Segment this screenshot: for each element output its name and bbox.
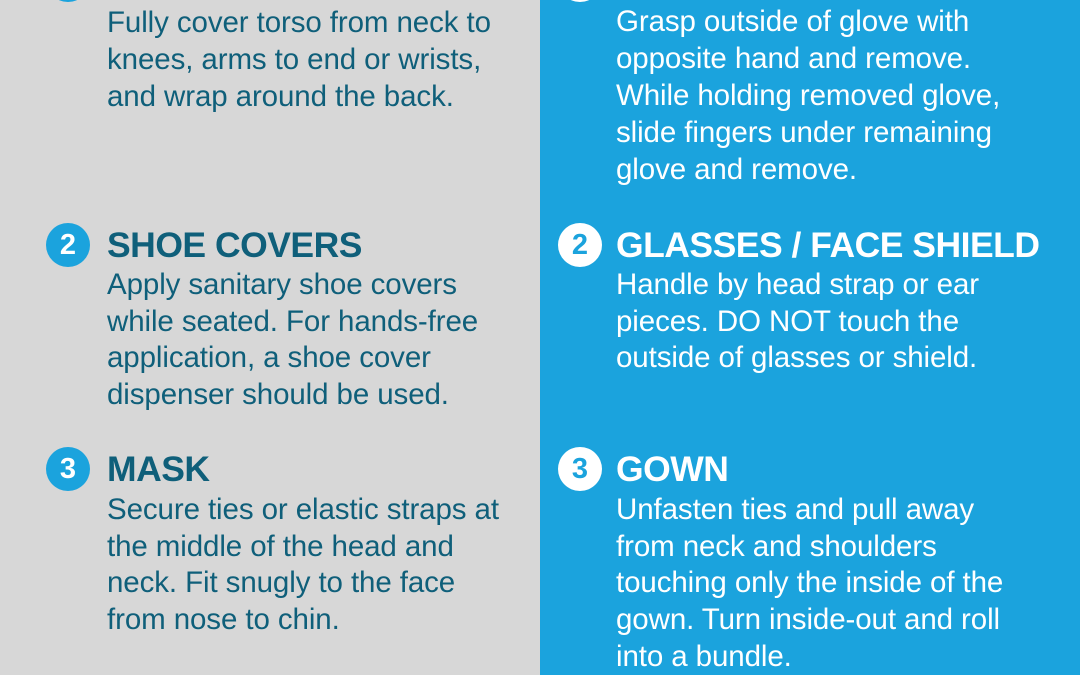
step 2 number: 2 bbox=[572, 229, 588, 261]
step 2 text bbox=[616, 268, 979, 374]
step 3 heading: MASK bbox=[107, 449, 210, 489]
step 2 number bbox=[46, 223, 90, 267]
step 1 text: While holding removed glove, bbox=[616, 79, 1000, 112]
step 2 text: Apply sanitary shoe covers bbox=[107, 268, 457, 301]
step 3 number: 3 bbox=[60, 453, 76, 485]
step 3 heading: GOWN bbox=[616, 449, 728, 489]
step 2 text bbox=[107, 268, 478, 411]
step 1 text: opposite hand and remove. bbox=[616, 42, 971, 75]
step 1 number (cut off) bbox=[46, 0, 90, 2]
step 3 text bbox=[107, 493, 499, 636]
step 3 text: gown. Turn inside-out and roll bbox=[616, 603, 1000, 636]
step 3 text: Unfasten ties and pull away bbox=[616, 493, 974, 526]
step 2 text: application, a shoe cover bbox=[107, 341, 431, 374]
step 3 number: 3 bbox=[572, 453, 588, 485]
step 3 text: into a bundle. bbox=[616, 640, 792, 673]
step 1 number (cut off) bbox=[558, 0, 602, 2]
panel: doffing (right) bbox=[540, 0, 1080, 675]
step 1 text: knees, arms to end or wrists, bbox=[107, 43, 481, 76]
step 1 text: and wrap around the back. bbox=[107, 80, 454, 113]
panel: donning (left) bbox=[0, 0, 540, 675]
step 1 text: Fully cover torso from neck to bbox=[107, 6, 491, 39]
step 1 text: glove and remove. bbox=[616, 153, 857, 186]
step 2 text: Handle by head strap or ear bbox=[616, 268, 979, 301]
step 1 text: slide fingers under remaining bbox=[616, 116, 992, 149]
step 2 heading: GLASSES / FACE SHIELD bbox=[616, 225, 1039, 265]
step 3 text: the middle of the head and bbox=[107, 530, 454, 563]
step 3 text: touching only the inside of the bbox=[616, 566, 1003, 599]
step 2 text: pieces. DO NOT touch the bbox=[616, 305, 959, 338]
step 1 text bbox=[107, 6, 491, 113]
step 1 text: Grasp outside of glove with bbox=[616, 5, 969, 38]
step 2 text: outside of glasses or shield. bbox=[616, 341, 977, 374]
step 2 text: while seated. For hands-free bbox=[107, 305, 478, 338]
step 3 number bbox=[46, 447, 90, 491]
step 3 text bbox=[616, 493, 1003, 673]
step 3 number bbox=[558, 447, 602, 491]
step 3 text: Secure ties or elastic straps at bbox=[107, 493, 499, 526]
step 2 number: 2 bbox=[60, 229, 76, 261]
step 1 text bbox=[616, 5, 1000, 186]
step 2 text: dispenser should be used. bbox=[107, 378, 449, 411]
step 3 text: neck. Fit snugly to the face bbox=[107, 566, 455, 599]
step 2 number bbox=[558, 223, 602, 267]
step 2 heading: SHOE COVERS bbox=[107, 225, 362, 265]
step 3 text: from nose to chin. bbox=[107, 603, 340, 636]
step 3 text: from neck and shoulders bbox=[616, 530, 937, 563]
